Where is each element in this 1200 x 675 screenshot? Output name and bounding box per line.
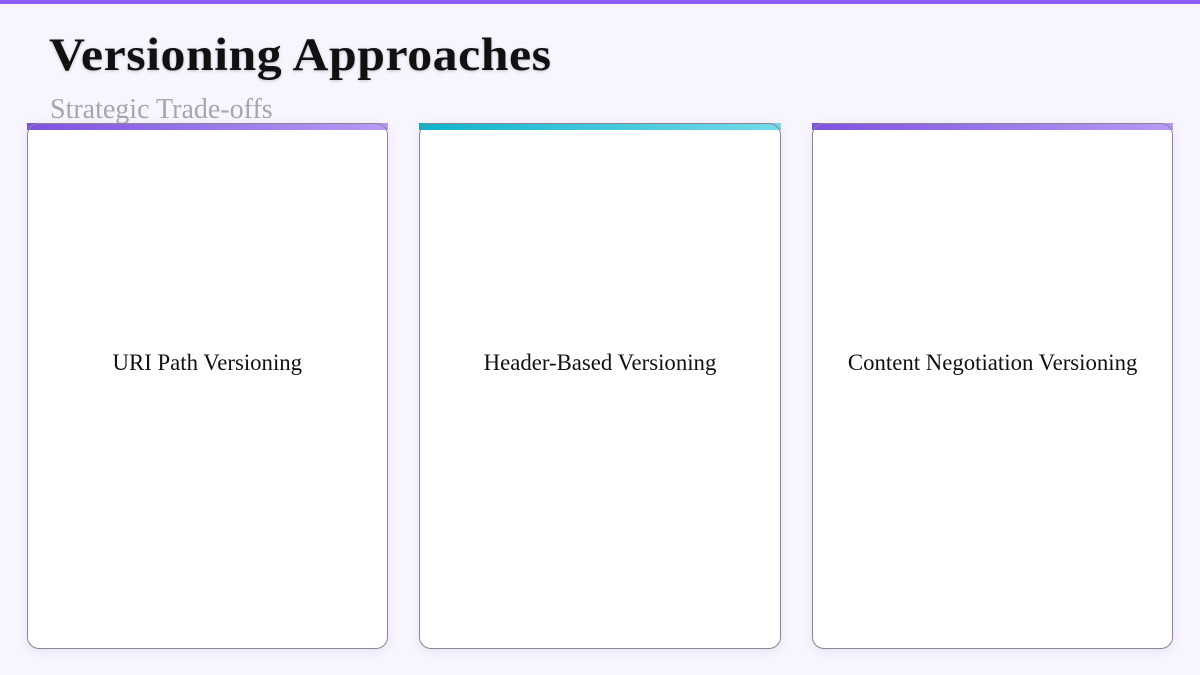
title: Versioning Approaches (49, 28, 552, 80)
card body with label (812, 123, 1173, 649)
card accent strip: teal (419, 123, 781, 130)
card accent strip: purple (812, 123, 1173, 130)
panel: Content Negotiation Versioning (810, 123, 1174, 652)
card accent strip: purple (27, 123, 388, 130)
top accent bar (0, 0, 1200, 4)
card body with label (419, 123, 781, 649)
card body with label: Content Negotiation Versioning (848, 350, 1137, 374)
card body with label (27, 123, 388, 649)
subtitle: Strategic Trade-offs (50, 94, 273, 125)
card body with label: URI Path Versioning (113, 350, 302, 374)
panel: URI Path Versioning (26, 123, 390, 652)
card body with label: Header-Based Versioning (484, 350, 716, 374)
panel: Header-Based Versioning (418, 123, 782, 652)
